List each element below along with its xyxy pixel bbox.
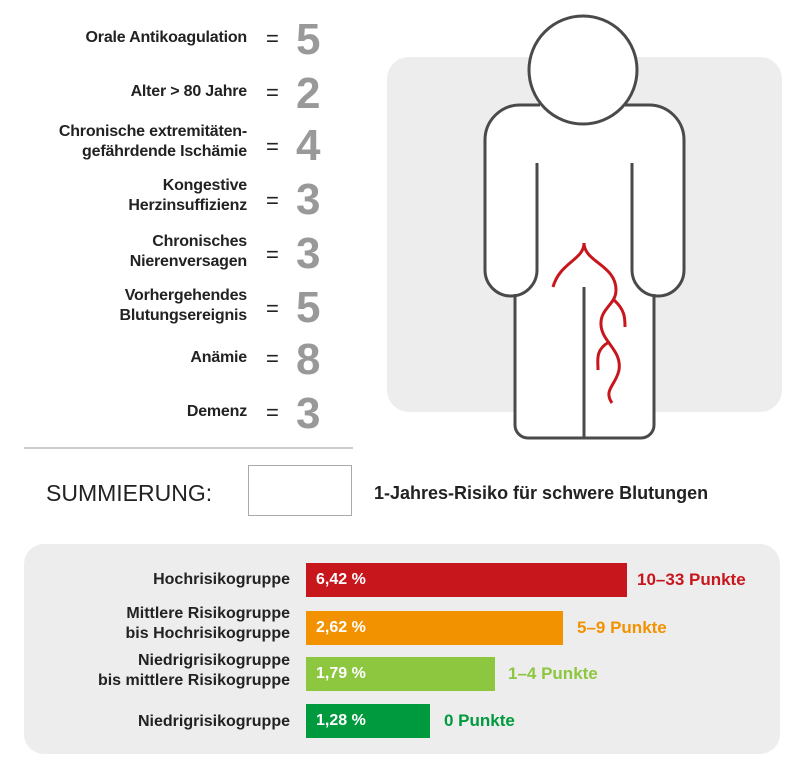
- factor: Blutungsereignis: Blutungsereignis: [120, 307, 247, 324]
- factor list: 8: [296, 335, 320, 384]
- risk bars: 2,62 %: [316, 619, 366, 636]
- factor list: =: [266, 80, 279, 105]
- panel: risk groups: [24, 544, 780, 754]
- risk bars: 0 Punkte: [444, 711, 515, 730]
- row: low-medium: Niedrigrisikogruppe: [138, 652, 290, 669]
- factor list: 3: [296, 389, 320, 438]
- panel: figure background: [387, 57, 782, 412]
- risk bars: 10–33 Punkte: [637, 570, 746, 589]
- factor list: [59, 15, 320, 438]
- factor: Ischämie: [59, 123, 247, 160]
- factor list: =: [266, 26, 279, 51]
- risk bars: 6,42 %: [316, 571, 366, 588]
- factor: Nierenversagen: [130, 233, 247, 270]
- factor: Alter: Alter > 80 Jahre: [131, 83, 247, 100]
- factor list: 5: [296, 15, 320, 64]
- risk bars: 1,28 %: [316, 712, 366, 729]
- factor list: =: [266, 296, 279, 321]
- factor list: =: [266, 134, 279, 159]
- factor: Nierenversagen: Nierenversagen: [130, 253, 247, 270]
- factor: Ischämie: Chronische extremitäten-: [59, 123, 247, 140]
- risk bars: [98, 563, 746, 738]
- risk bars: 1–4 Punkte: [508, 664, 598, 683]
- factor list: 4: [296, 121, 320, 170]
- factor list: 3: [296, 229, 320, 278]
- factor: Orale Antikoagulation: Orale Antikoagulation: [86, 29, 247, 46]
- factor: Demenz: Demenz: [187, 403, 247, 420]
- summation box: [248, 465, 352, 516]
- row: medium-high: bis Hochrisikogruppe: [126, 625, 290, 642]
- factor list: =: [266, 242, 279, 267]
- row: low: Niedrigrisikogruppe: [138, 713, 290, 730]
- factor list: 3: [296, 175, 320, 224]
- risk bars: 5–9 Punkte: [577, 618, 667, 637]
- factor: Blutungsereignis: Vorhergehendes: [125, 287, 247, 304]
- factor list: 5: [296, 283, 320, 332]
- heading: risk: 1-Jahres-Risiko für schwere Blutungen: [374, 483, 708, 503]
- factor: Herzinsuffizienz: Kongestive: [163, 177, 247, 194]
- row: low-medium: bis mittlere Risikogruppe: [98, 672, 290, 689]
- row: low-medium: [98, 652, 290, 689]
- factor: Blutungsereignis: [120, 287, 247, 324]
- factor: Nierenversagen: Chronisches: [152, 233, 247, 250]
- factor: Anämie: Anämie: [190, 349, 247, 366]
- factor list: =: [266, 188, 279, 213]
- factor: Ischämie: gefährdende Ischämie: [82, 143, 247, 160]
- summation label: SUMMIERUNG:: [46, 480, 212, 506]
- factor list: =: [266, 346, 279, 371]
- row: high: Hochrisikogruppe: [153, 571, 290, 588]
- row: medium-high: [126, 605, 290, 642]
- factor list: =: [266, 400, 279, 425]
- row: medium-high: Mittlere Risikogruppe: [126, 605, 290, 622]
- factor: Herzinsuffizienz: Herzinsuffizienz: [128, 197, 247, 214]
- factor: Herzinsuffizienz: [128, 177, 247, 214]
- factor list: 2: [296, 69, 320, 118]
- risk bars: 1,79 %: [316, 665, 366, 682]
